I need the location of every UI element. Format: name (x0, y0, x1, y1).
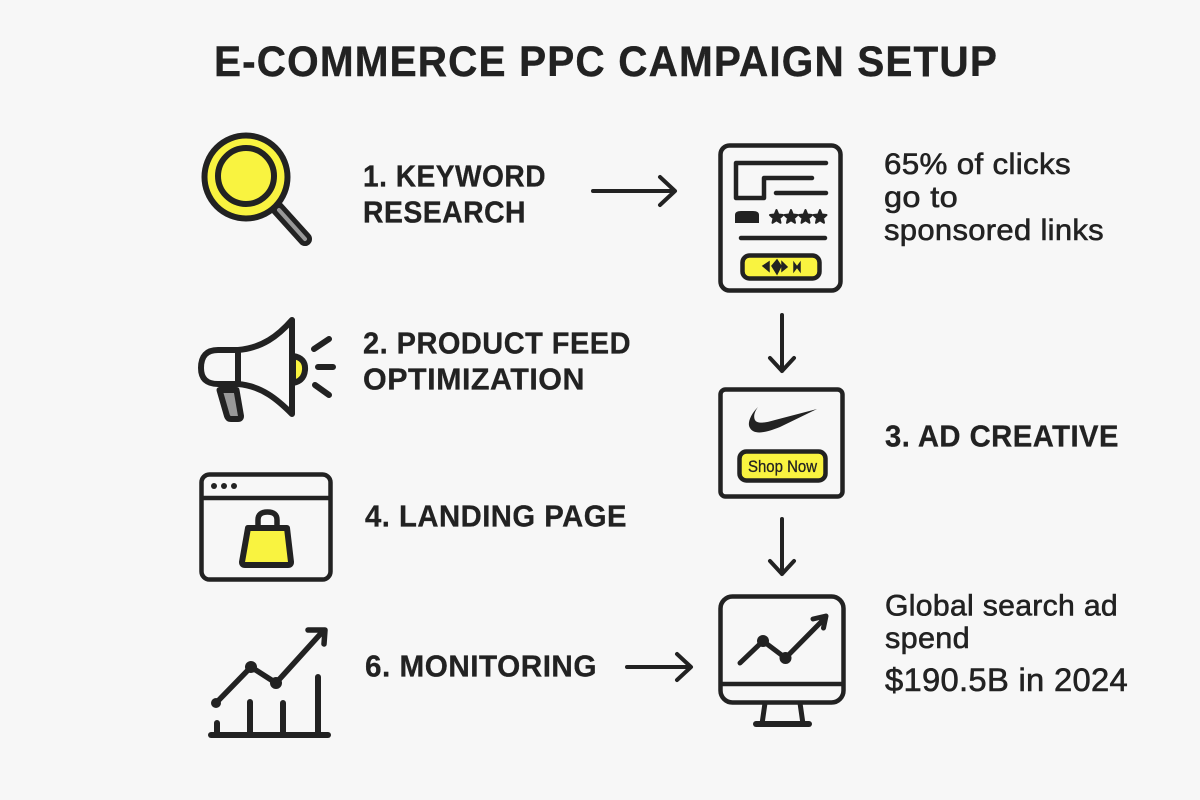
arrow: ad preview to ad creative (770, 315, 794, 371)
arrow: monitoring to screen (627, 654, 691, 680)
label: step 4 landing page: 4. LANDING PAGE (365, 500, 627, 534)
title: E-COMMERCE PPC CAMPAIGN SETUP (214, 38, 998, 86)
text: global search ad spend statistic (885, 590, 1128, 698)
swoosh (749, 407, 817, 432)
label: step 1 keyword research (363, 160, 546, 230)
label: step 6 monitoring: 6. MONITORING (365, 650, 597, 684)
label: step 2 product feed optimization: OPTIMIZATION (363, 362, 585, 396)
text: global search ad spend statistic: Global search ad (885, 590, 1118, 622)
icon: megaphone (201, 320, 333, 419)
icon: magnifying glass (204, 136, 305, 239)
icon: sponsored search result (720, 146, 840, 290)
label: step 2 product feed optimization: 2. PRODUCT FEED (363, 326, 631, 360)
label: step 3 ad creative: 3. AD CREATIVE (885, 420, 1119, 454)
text: global search ad spend statistic: spend (885, 622, 970, 655)
icon: ad creative with swoosh (720, 390, 842, 496)
text: click share statistic: 65% of clicks (884, 148, 1071, 181)
four rating stars (770, 210, 826, 223)
label: step 1 keyword research: RESEARCH (363, 196, 526, 230)
label: step 2 product feed optimization (363, 326, 631, 396)
text: click share statistic: sponsored links (884, 214, 1104, 247)
icon: landing page browser with bag (201, 474, 331, 580)
icon: growth chart (211, 630, 328, 735)
button: shop now: Shop Now (748, 457, 818, 476)
arrow: keyword research to ad preview (593, 177, 675, 205)
text: global search ad spend statistic: $190.5B in 2024 (885, 662, 1128, 698)
icon: monitor with trend line (720, 596, 845, 724)
arrow: ad creative to monitoring screen (770, 519, 794, 574)
text: click share statistic (884, 148, 1104, 247)
text: click share statistic: go to (884, 181, 958, 214)
label: step 1 keyword research: 1. KEYWORD (363, 160, 546, 194)
